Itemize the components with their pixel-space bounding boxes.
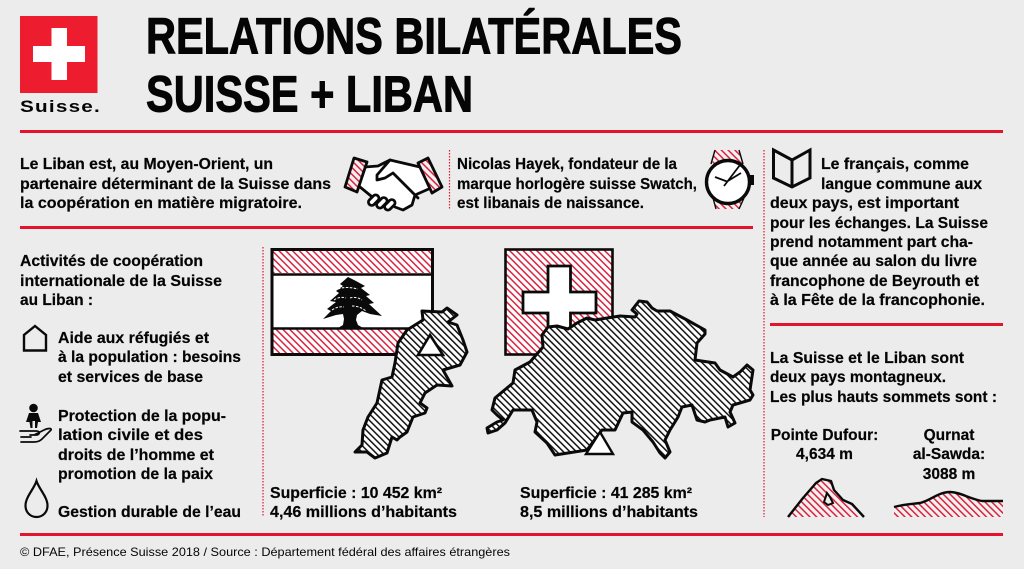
title: RELATIONS BILATÉRALES [146,8,682,64]
text: Lebanon figures: 4,46 millions d’habitants [270,504,457,521]
footer source: © DFAE, Présence Suisse 2018 / Source : Département fédéral des affaires étrangères [20,545,510,559]
text: Pointe Dufour [771,427,878,463]
logo: Suisse: Suisse. [20,97,101,116]
text: water management: Gestion durable de l’eau [58,504,241,521]
text: Nicolas Hayek: est libanais de naissance. [457,195,644,212]
text: Nicolas Hayek: marque horlogère suisse Swatch, [457,176,697,193]
text: Qurnat al-Sawda: Qurnat [924,427,974,444]
text: mountains intro [770,350,997,406]
text: cooperation heading: Activités de coopération [20,253,203,270]
text: civil protection [58,408,226,483]
text: Qurnat al-Sawda: 3088 m [923,466,975,483]
text: Nicolas Hayek [457,156,697,212]
text: refugee aid: Aide aux réfugiés et [58,330,209,347]
text: Switzerland figures [520,485,698,521]
text: cooperation heading: au Liban : [20,292,93,309]
text: Lebanon figures [270,485,457,521]
text: migration partner: Le Liban est, au Moyen-Orient, un [20,156,273,173]
Swiss flag [506,250,612,354]
icon: cedar tree [323,277,382,328]
text: Pointe Dufour: Pointe Dufour: [771,427,878,444]
logo: Suisse [20,16,101,116]
text: French language: Le français, comme [821,156,969,173]
text: mountains intro: La Suisse et le Liban sont [770,350,964,367]
Lebanese flag [272,250,432,354]
text: Switzerland figures: Superficie : 41 285 km² [520,485,692,502]
icon: Swiss peak triangle [586,432,613,454]
icon: person on hand [20,404,51,442]
text: French language: francophone de Beyrouth et [770,273,979,290]
icon: water drop [26,481,48,517]
text: migration partner [20,156,331,212]
text: migration partner: partenaire déterminant de la Suisse dans [20,176,331,193]
map: Lebanon [355,308,467,458]
text: French language: pour les échanges. La Suisse [770,215,988,232]
text: French language: deux pays, est important [770,195,959,212]
text: cooperation heading [20,253,222,309]
text: civil protection: droits de l’homme et [58,447,214,464]
text: French language: à la Fête de la francophonie. [770,292,985,309]
text: civil protection: Protection de la popu- [58,408,226,425]
text: migration partner: la coopération en matière migratoire. [20,195,302,212]
text: refugee aid: à la population : besoins [58,349,241,366]
icon: watch [706,150,754,209]
text: Lebanon figures: Superficie : 10 452 km² [270,485,442,502]
title: SUISSE + LIBAN [146,66,473,122]
text: French language: prend notamment part cha- [770,234,973,251]
text: Switzerland figures: 8,5 millions d’habitants [520,504,698,521]
text: Nicolas Hayek: Nicolas Hayek, fondateur de la [457,156,677,173]
icon: house [24,326,46,350]
text: Pointe Dufour: 4,634 m [796,446,853,463]
text: French language [770,156,988,309]
title [146,8,682,122]
icon: handshake [345,158,442,211]
text: cooperation heading: internationale de la Suisse [20,273,222,290]
text: civil protection: lation civile et des [58,427,203,444]
icon: Qurnat al-Sawda mountain [894,492,1003,517]
text: mountains intro: deux pays montagneux. [770,369,946,386]
text: mountains intro: Les plus hauts sommets sont : [770,389,997,406]
text: refugee aid [58,330,241,386]
text: French language: langue commune aux [821,176,982,193]
icon: Pointe Dufour mountain [788,479,864,517]
text: Qurnat al-Sawda: al-Sawda: [913,446,985,463]
text: Qurnat al-Sawda [913,427,985,483]
text: civil protection: promotion de la paix [58,466,213,483]
map: Switzerland [487,301,753,458]
text: French language: que année au salon du livre [770,253,977,270]
icon: Lebanon peak triangle [418,335,443,355]
icon: open book [774,150,810,187]
text: refugee aid: et services de base [58,369,203,386]
